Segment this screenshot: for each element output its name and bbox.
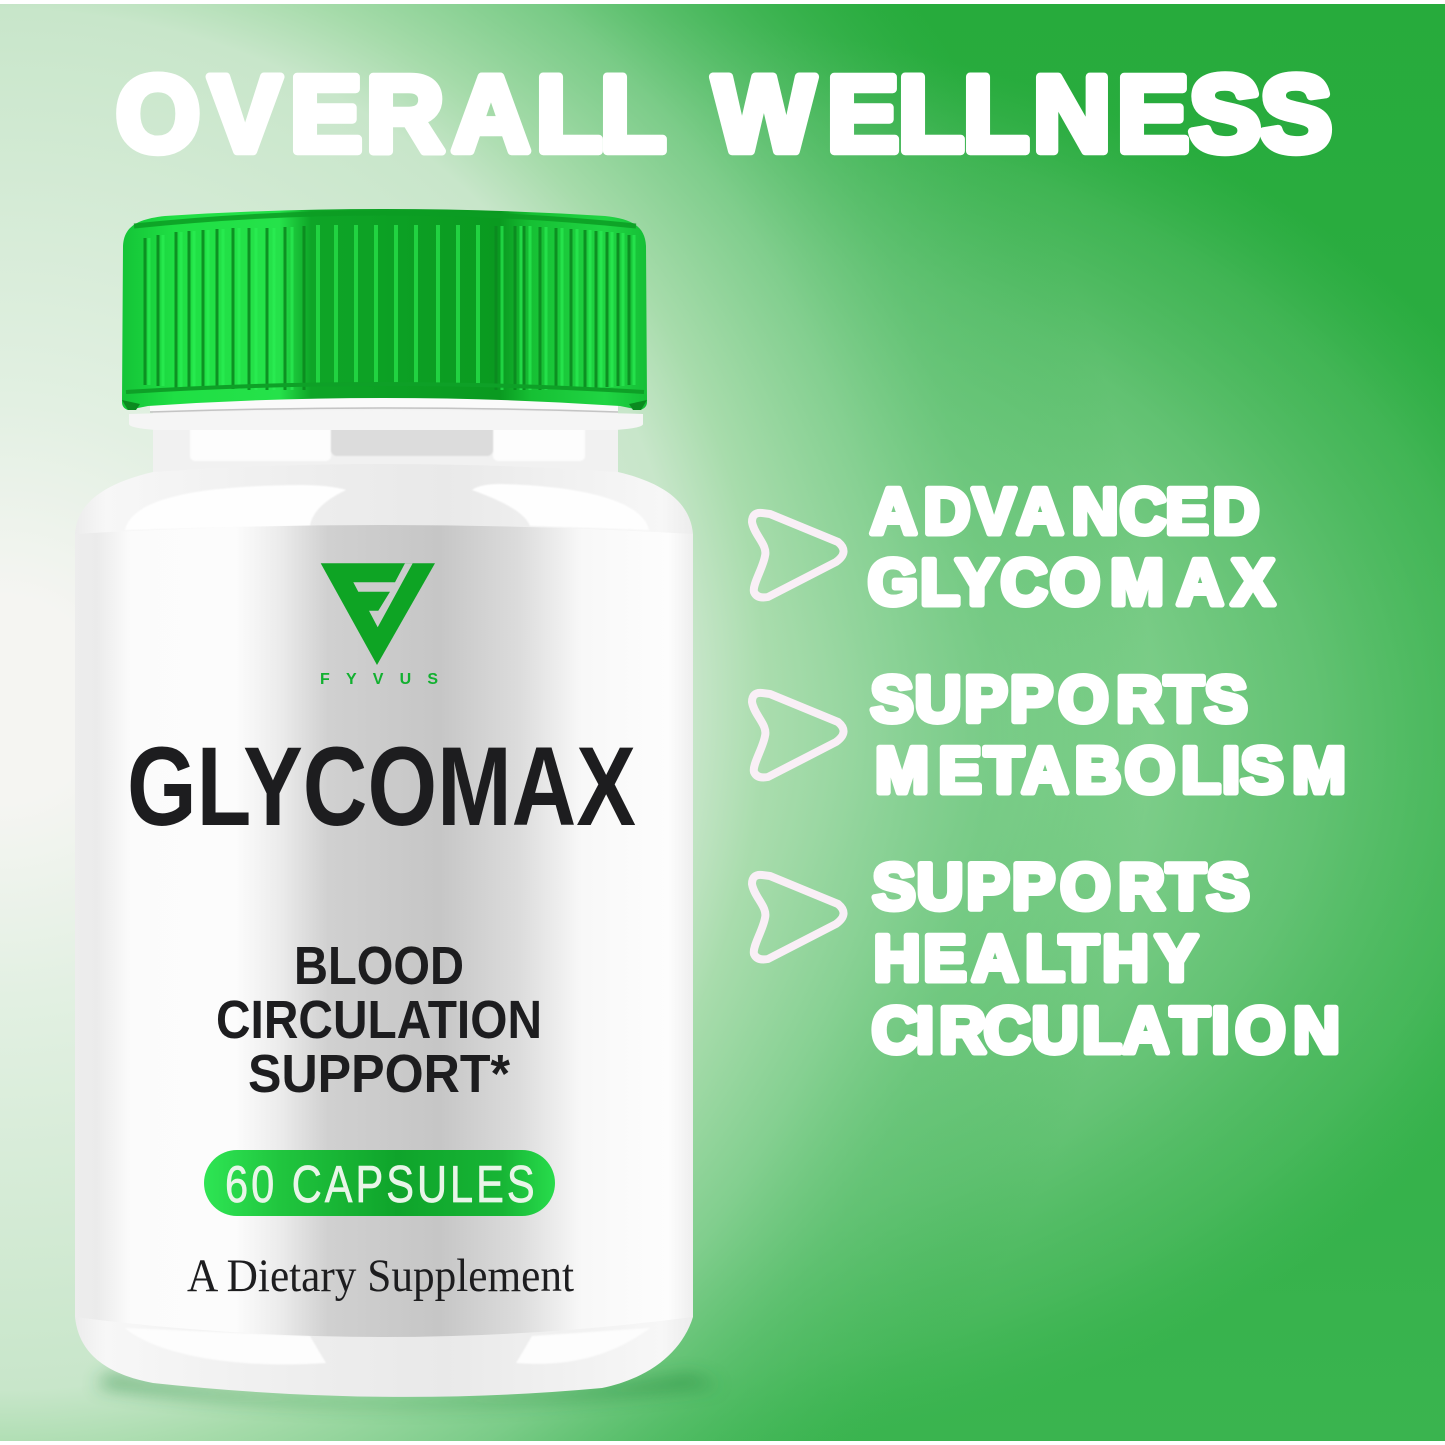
bottle shadow: [95, 1375, 720, 1405]
title: OVERALL: [116, 53, 666, 174]
benefit 3: [752, 851, 1340, 1066]
benefit text: CIRCULATION: [872, 994, 1340, 1066]
bottle body: [75, 464, 693, 1397]
bottle cap: [122, 209, 647, 410]
bottle neck: [129, 390, 643, 480]
arrow icon: [752, 513, 844, 597]
product bottle: [75, 209, 720, 1405]
dietary supplement line: A Dietary Supplement: [187, 1250, 574, 1302]
product name: GLYCOMAX: [127, 724, 636, 849]
title: WELLNESS: [713, 53, 1332, 174]
benefit text: SUPPORTS: [870, 664, 1248, 736]
benefit text: SUPPORTS: [872, 851, 1250, 923]
product description: CIRCULATION: [216, 990, 542, 1050]
product description: [216, 936, 542, 1104]
cap ribs: [145, 226, 629, 390]
shoulder and base highlights: [125, 484, 650, 1364]
product description: SUPPORT*: [248, 1044, 510, 1104]
arrow icon: [752, 875, 844, 959]
arrow icon: [752, 693, 844, 777]
benefit 2: [752, 664, 1346, 806]
brand logo: [320, 563, 438, 688]
bottle label: [75, 525, 693, 1337]
benefit text: METABOLISM: [875, 734, 1346, 806]
benefit text: [872, 851, 1340, 1066]
benefit text: [870, 664, 1346, 806]
brand logo: FYVUS: [320, 671, 438, 688]
benefit text: GLYCOMAX: [868, 546, 1275, 618]
title: [116, 53, 1332, 174]
benefit 1: [752, 476, 1275, 618]
product description: BLOOD: [294, 936, 464, 996]
benefit text: [868, 476, 1275, 618]
benefit text: ADVANCED: [870, 476, 1259, 548]
benefit text: HEALTHY: [874, 922, 1198, 994]
capsule count badge: 60 CAPSULES: [225, 1155, 535, 1213]
